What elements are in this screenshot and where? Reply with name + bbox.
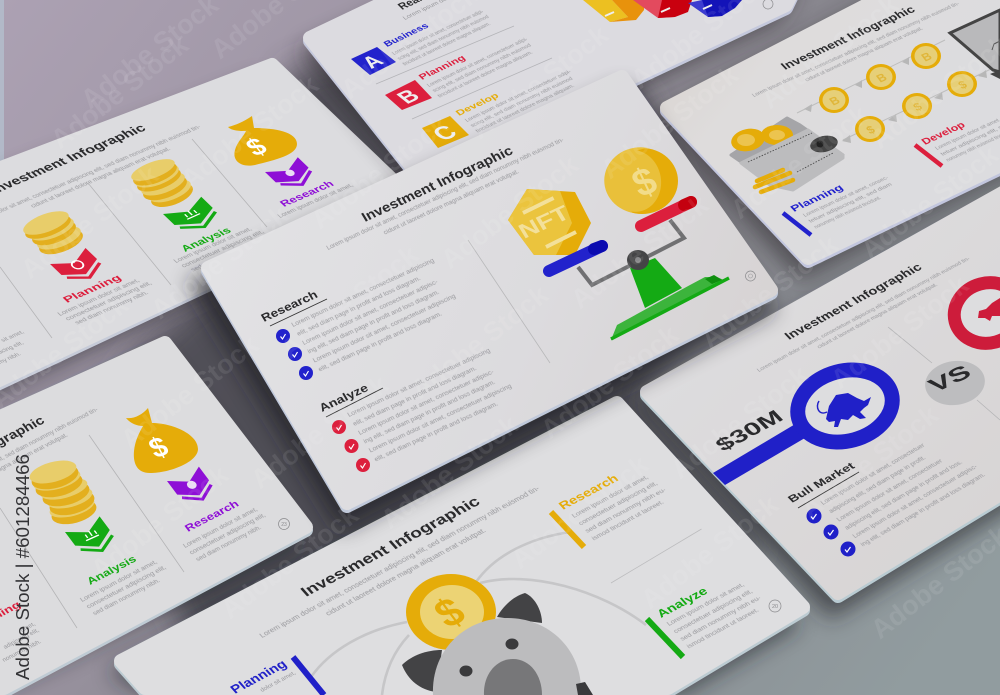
text block: research body: sed diam nonummy nibh. [195,524,263,563]
section: analyze: Lorem ipsum dolor sit amet, consectetuer adipiscing [346,347,492,419]
list: blue check items: Lorem ipsum dolor sit amet, consectetuer [835,458,944,523]
stock watermarks: Adobe Stock [15,159,165,285]
icon: dollar coins: $ [955,78,970,92]
text block: research body: Lorem ipsum dolor sit amet, [182,506,259,550]
text block: develop body: scing elit, sed diam nonummy nibh euismod [469,76,574,129]
callout: planning: Planning [789,183,846,214]
icon: scale base [611,258,729,340]
callout: planning: Lorem ipsum dolor sit amet, consec- [802,175,890,218]
text block: business body: scing elit, sed diam nonummy nibh euismod [396,14,491,62]
list: blue check items [806,430,987,556]
icon: gold coin [406,574,496,650]
list: blue check items: ing elit, sed diam page in profit and loss diagram. [859,472,987,548]
text block: business body: tincidunt ut laoreet dolore magna aliquam. [402,21,493,67]
text block: subtitle: Lorem ipsum dolor sit amet, consectetuer adipiscing elit, sed diam nonummy nibh euismod tin- [756,256,972,373]
text block: planning body: tincidunt ut laoreet dolore magna aliquam. [437,50,535,99]
icon: money bag [126,408,198,473]
text block: business body: Lorem ipsum dolor sit amet, consectetuer adipi- [391,9,486,56]
section: research [259,257,463,380]
text block: planning body: scing elit, sed diam nonummy nibh euismod [431,43,533,94]
text block: planning body [56,275,160,328]
diagram: connector curves [311,532,646,695]
section: research: elit, sed diam page in profit and loss diagram. [317,311,444,373]
heading: slide title: Investment Infographic [781,260,925,342]
stock watermarks: Adobe Stock [85,459,235,585]
heading: Bull Market [786,461,859,508]
text: value: $30M [711,407,788,456]
icon: coin stack planning [20,206,86,259]
stock watermarks: Adobe Stock [535,319,685,445]
section: research: Lorem ipsum dolor sit amet, consectetuer adipisc- [301,279,439,347]
callout: analyze: sed diam nonummy nibh eu- [679,595,763,643]
callout: research: consectetuer adipiscing elit, [577,480,660,527]
icon: bitcoin coins: B [826,93,843,108]
text block: subtitle: Lorem ipsum dolor sit amet, consectetuer adipiscing elit, sed diam nonummy nibh euismod tin- [751,1,961,98]
label: Planning: Planning [61,273,124,305]
icon: letter B [385,80,432,110]
left edge strip [0,0,4,170]
text block: analysis body: consectetuer adipiscing elit, [85,564,168,610]
icon: page number: 20 [772,604,778,610]
text block: research body: Lorem ipsum dolor sit amet, [276,182,355,219]
icon: dollar coins: $ [910,100,925,114]
icon: blue magnifier with bull [713,360,900,485]
stock watermarks: Adobe Stock [405,279,555,405]
stock watermarks: Adobe Stock [825,269,975,395]
icon: wallet [729,118,843,192]
floor shadow between slides [90,40,760,660]
icon: bitcoin coins: B [873,70,890,85]
icon: page number [278,518,290,530]
panel: piggy bank slide [108,403,803,695]
section: analyze: ing elit, sed diam page in profit and loss diagram. [362,379,497,445]
heading: slide title: Investment Infographic [297,494,484,600]
panel: bull market slide [632,172,1000,620]
section: research: Lorem ipsum dolor sit amet, consectetuer adipiscing [290,257,436,329]
stock watermarks: Adobe Stock [505,449,655,575]
text block: planning body: sed diam nonummy nibh. [73,290,151,326]
icon: page number [763,0,773,9]
icon: dollar coin: $ [625,159,664,206]
stock watermarks: Adobe Stock [145,199,295,325]
icon: NFT token [508,189,591,255]
label: Analysis: Analysis [179,225,234,254]
stock watermarks: Adobe Stock [435,149,585,275]
section: analyze: elit, sed diam page in profit and loss diagram. [373,401,500,463]
text block: clipped planning body: amet, [19,621,37,634]
label: Analysis: Analysis [85,553,139,587]
icon: coin stack analysis [129,155,196,212]
text block: clipped planning body: nonummy nibh. [1,638,43,664]
panel: NFT scale slide [188,77,775,530]
text block: research body [182,505,273,564]
text block: develop body: Lorem ipsum dolor sit amet, consectetuer adipi- [464,69,573,123]
section: research: elit, sed diam page in profit and loss diagram. [296,275,422,338]
icon: red bear ring [947,275,1000,351]
text block: clipped planning body [1,621,43,664]
section: analyze: Analyze [317,382,371,415]
callout: planning [227,657,324,695]
label: Business: Business [381,21,431,48]
icon: pivot [627,250,649,270]
stock watermarks: Adobe Stock [595,59,745,185]
icon: money bag: $ [144,431,174,465]
callout: research: sed diam nonummy nibh eu- [584,487,668,535]
section: analyze: Lorem ipsum dolor sit amet, consectetuer adipisc- [357,369,495,437]
icon: piggy bank [402,593,593,695]
text block: subtitle: cidunt ut laoreet dolore magna aliquam erat volutpat. [325,528,488,617]
text block: analysis body: Lorem ipsum dolor sit amet, [172,226,254,264]
panel: coin stack steps slide [0,65,403,410]
callout: research: ismod tincidunt ut laoreet. [590,499,666,542]
section: analyze [317,347,519,472]
heading: slide title: Investment Infographic [359,143,516,225]
icon: green chevron [65,516,119,558]
stock watermarks: Adobe Stock [795,399,945,525]
section: research: Research [259,289,320,325]
icon: letter A [351,47,396,75]
stock watermarks: Adobe Stock [665,359,815,485]
callout: research [551,472,674,547]
icon: bitcoin coins: B [918,49,935,64]
text block: clipped planning body: adipiscing elit, [2,627,41,651]
icon: bitcoin coins [819,43,941,113]
stock watermarks: Adobe Stock [695,229,845,355]
list: blue check items: adipiscing elit, sed diam page in profit and loss. [843,459,964,531]
section: research: Lorem ipsum dolor sit amet, consectetuer adipiscing [312,293,458,364]
icon: purple chevron [265,157,319,192]
stock watermarks: Adobe Stock [855,139,1000,265]
callout: analyze: Lorem ipsum dolor sit amet, [666,582,746,628]
stock watermarks: Adobe Stock [305,109,455,235]
heading: slide title: Investment Infographic [779,4,919,72]
icon: dollar coins [855,71,977,142]
list: blue check items: adipiscing elit, sed diam page in profit. [827,455,928,515]
text block: research body: consectetuer adipiscing elit, [188,512,268,556]
stock watermarks: Adobe Stock [465,19,615,145]
callout: planning: tetuer adipiscing elit, sed diam [808,182,894,224]
callout: analyze: consectetuer adipiscing elit, [672,588,755,635]
callout: research: Research [556,472,621,512]
icon: money bag [228,116,297,166]
stock watermarks: Adobe Stock [245,369,395,495]
label: Research: Research [278,179,337,209]
text block: subtitle: cidunt ut laoreet dolore magna aliquam erat volutpat. [804,26,925,83]
text block: analysis body: sed diam nonummy nibh. [189,238,264,273]
icon: coin stack [27,456,99,529]
icon: VS badge [922,357,988,409]
heading: Bull Market: Bull Market [786,461,858,505]
text block: subtitle: Lorem ipsum dolor sit amet, consectetuer adipiscing elit, sed diam nonummy nibh euismod tin- [259,485,542,640]
icon: letter B: B [391,85,425,107]
icon: money bag: $ [240,133,273,161]
diagram: connector lines and arrows [797,40,993,143]
callout: analyze [647,580,769,657]
icon: NFT token: NFT [515,202,574,243]
stock watermarks: Adobe Stock [215,499,365,625]
text block: analysis body: Lorem ipsum dolor sit amet, [79,559,159,604]
stock watermarks: Adobe Stock [115,329,265,455]
text block: clipped left column [0,327,26,365]
text block: clipped left column: sit amet, [0,329,26,343]
callout: research: Lorem ipsum dolor sit amet, [571,474,650,520]
stock id caption: Adobe Stock | #601284466 [13,454,33,680]
panel: crypto wallet slide [650,0,1000,282]
text block: subtitle: cidunt ut laoreet dolore magna aliquam erat volutpat. [29,146,173,209]
icon: balance scale with NFT and coin [508,146,729,340]
callout: analyze: Analyze [654,584,711,620]
text block: subtitle: cidunt ut laoreet dolore magna aliquam erat volutpat. [816,282,940,350]
stock watermarks: Adobe Stock [275,239,425,365]
icon: gold coin: $ [425,588,474,636]
text block: analysis body: sed diam nonummy nibh. [92,577,162,617]
callout: analyze: ismod tincidunt ut laoreet. [685,607,761,650]
icon: dollar coin [602,146,678,216]
icon: letter C: C [427,121,464,145]
icon: page number [769,600,781,612]
stock watermarks: Adobe Stock [635,489,785,615]
text block: analysis body [172,223,272,275]
icon: page number [746,271,756,281]
section: analyze: Lorem ipsum dolor sit amet, consectetuer adipiscing [368,383,514,454]
icon: green chevron [163,197,224,235]
icon: page number: 23 [281,522,287,528]
icon: letter C [422,116,469,148]
text block: subtitle: Lorem ipsum dolor sit amet, consectetuer adipiscing elit, sed diam nonummy nibh euismod tin- [325,137,565,252]
icon: letter A: A [357,52,389,72]
text block: planning body: Lorem ipsum dolor sit amet, [56,278,142,317]
label: Develop: Develop [453,91,502,117]
icon: purple chevron [167,467,218,507]
stock watermarks: Adobe Stock [725,99,875,225]
panel: real estate slide [300,0,800,190]
section: research: ing elit, sed diam page in profit and loss diagram. [306,289,441,355]
stock watermarks: Adobe Stock [565,189,715,315]
text block: analysis body: consectetuer adipiscing elit, [180,229,266,269]
callout: planning: dolor sit amet, [259,670,298,694]
text block: develop body: tincidunt ut laoreet dolore magna aliquam. [475,83,577,134]
callout: develop: Develop [920,120,968,147]
stock watermarks: Adobe Stock [375,409,525,535]
callout: develop [915,108,1000,166]
icon: VS badge: VS [924,361,976,397]
text block: analysis body [79,557,173,618]
text block: planning body: consectetuer adipiscing elit, [64,280,154,322]
stock watermarks: Adobe Stock [175,69,325,195]
text block: subtitle: cidunt ut laoreet dolore magna aliquam erat volutpat. [382,168,521,236]
icon: dollar coins: $ [863,123,878,137]
callout: planning: nonummy nibh euismod tincidunt. [813,195,883,230]
label: Planning: Planning [416,53,468,81]
callout: planning [783,175,901,235]
panel: money bag steps slide [0,343,306,691]
icon: isometric colour blocks [583,0,742,22]
section: analyze: elit, sed diam page in profit and loss diagram. [352,365,478,428]
list: blue check items: Lorem ipsum dolor sit amet, consectetuer adipisc- [851,464,979,540]
icon: monitor [950,10,1000,79]
stock watermarks: Adobe Stock [45,29,195,155]
icon: scale arm [578,220,684,285]
label: Research: Research [183,498,241,534]
icon: blue pan [549,246,602,271]
text block: planning body: Lorem ipsum dolor sit amet, consectetuer adipi- [426,37,530,88]
icon: red chevron [50,248,108,285]
icon: red pan [641,202,691,226]
list: blue check items: Lorem ipsum dolor sit amet, consectetuer [820,442,926,506]
